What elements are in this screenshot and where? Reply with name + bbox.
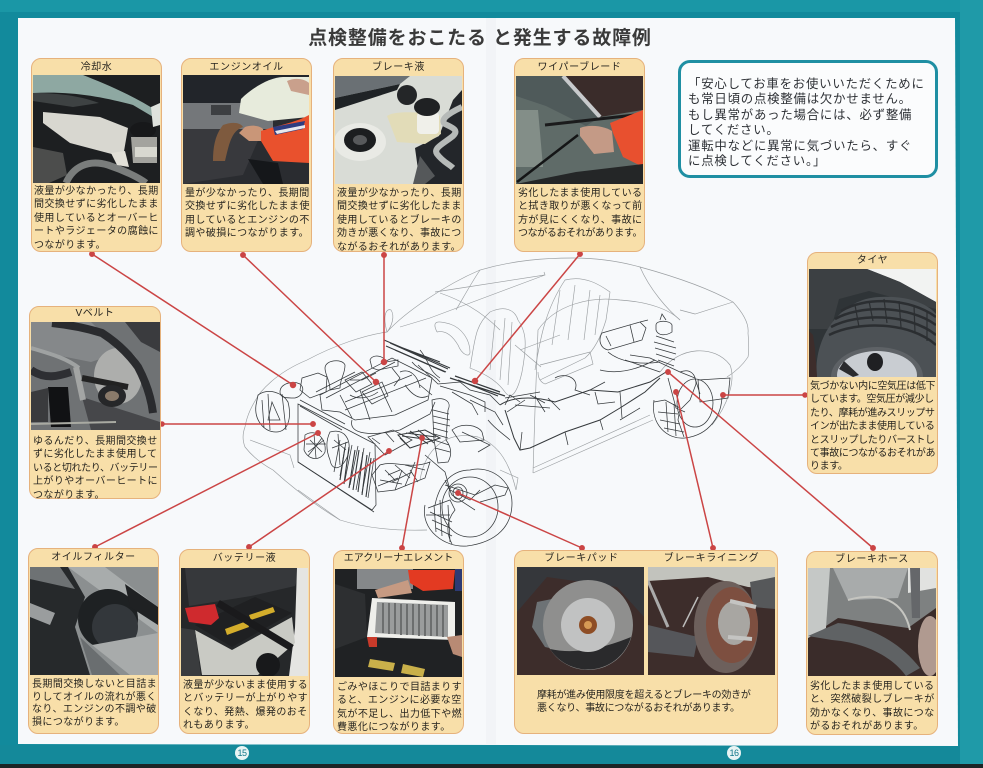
description: oil filter: 長期間交換しないと目詰ま: [32, 679, 157, 690]
heading: air cleaner element: エアクリーナエレメント: [344, 553, 453, 564]
description: engine oil: 交換せずに劣化したまま使: [185, 201, 310, 212]
car cutaway illustration: [242, 258, 749, 546]
description: tire: インが出たまま使用している: [810, 421, 934, 432]
description: battery fluid: [183, 679, 308, 731]
heading: brake pad: ブレーキパッド: [544, 553, 619, 564]
description: oil filter: なり、エンジンの不調や破: [32, 704, 157, 715]
front lamp: [256, 391, 290, 432]
callout text: も常日頃の点検整備は欠かせません。: [688, 92, 912, 106]
description: tire: しています。空気圧が減少し: [810, 394, 934, 405]
panel: V-belt: [29, 306, 161, 499]
description: air cleaner element: 気が不足し、出力低下や燃: [337, 709, 462, 720]
heading: battery fluid: バッテリー液: [213, 553, 276, 564]
description: V-belt: ずに劣化したまま使用して: [33, 449, 157, 460]
photo: oil filter: [30, 567, 158, 675]
page number 16: [727, 746, 741, 760]
leader: tire: [721, 393, 807, 397]
page number 16: 16: [729, 748, 738, 758]
description: tire: て事故につながるおそれがあ: [810, 448, 935, 459]
description: wiper blade: 劣化したまま使用している: [518, 188, 642, 199]
description: coolant: 間交換せずに劣化したまま: [34, 199, 159, 210]
heading: V-belt: Vベルト: [75, 308, 115, 319]
description: engine oil: [185, 187, 310, 239]
description: air cleaner element: 費悪化につながります。: [337, 722, 451, 733]
description: air cleaner element: ごみやほこりで目詰まりす: [337, 682, 462, 693]
steering wheel and seats: [435, 322, 470, 355]
description: tire: とスリップしたりバーストし: [810, 435, 935, 446]
heading: coolant: 冷却水: [81, 62, 112, 73]
callout text: 運転中などに異常に気づいたら、すぐ: [688, 139, 912, 153]
description: coolant: つながります。: [34, 240, 106, 251]
leader: air cleaner: [400, 436, 424, 550]
description: battery fluid: 液量が少ないまま使用する: [183, 680, 308, 691]
reservoirs: [280, 382, 303, 398]
description: V-belt: いると切れたり、バッテリー: [33, 463, 158, 474]
description: brake hose: [810, 680, 935, 732]
description: air cleaner element: [337, 681, 462, 733]
rear spring: [656, 321, 672, 335]
photo: battery: [181, 568, 308, 676]
callout text: [688, 77, 925, 168]
description: engine oil: 量が少なかったり、長期間: [185, 188, 310, 199]
description: brake fluid: 間交換せずに劣化したまま: [337, 201, 462, 212]
photo: pouring engine oil: [183, 75, 309, 184]
description: V-belt: 上がりやオーバーヒートに: [33, 476, 158, 487]
photo: coolant reservoir: [33, 75, 160, 183]
panel: air cleaner element: [333, 550, 464, 734]
description: coolant: 使用しているとオーバーヒ: [34, 213, 159, 224]
description: wiper blade: つながるおそれがあります。: [518, 228, 642, 239]
description: air cleaner element: ると、エンジンに必要な空: [337, 695, 462, 706]
title: 点検整備をおこたる と発生する故障例: [308, 28, 652, 49]
heading: tire: タイヤ: [857, 255, 888, 266]
battery and air box: [368, 430, 412, 455]
callout text: してください。: [688, 123, 780, 137]
leader: wiper blade: [472, 252, 582, 384]
strut: [432, 399, 451, 463]
panel: coolant: [31, 58, 162, 252]
heading: brake lining: ブレーキライニング: [664, 553, 759, 564]
photo: air cleaner: [335, 569, 462, 677]
callout: safety message: [678, 60, 938, 178]
description: brake hose: と、突然破裂しブレーキが: [810, 694, 935, 705]
panel: brake pad and brake lining: [514, 550, 778, 734]
callout text: もし異常があった場合には、必ず整備: [688, 108, 912, 122]
description: oil filter: りしてオイルの流れが悪く: [32, 692, 157, 703]
panel: tire: [807, 252, 938, 474]
front wheel: [424, 469, 512, 546]
description: oil filter: [32, 678, 157, 728]
photo: wiper blade: [516, 76, 643, 184]
description: brake hose: がるおそれがあります。: [810, 721, 924, 732]
description: tire: [810, 380, 935, 472]
muffler: [600, 322, 646, 350]
panel: wiper blade: [514, 58, 645, 252]
callout text: に点検してください。」: [688, 154, 826, 168]
fan and alternator: [304, 433, 326, 459]
callout text: 「安心してお車をお使いいただくために: [688, 77, 925, 91]
description: battery fluid: とバッテリーが上がりやす: [183, 693, 308, 704]
description: oil filter: 損につながります。: [32, 717, 125, 728]
description: brake fluid: [337, 187, 462, 253]
leader: brake fluid: [382, 253, 386, 364]
leader: engine oil: [241, 253, 378, 384]
description: brake fluid: 使用しているとブレーキの: [337, 215, 462, 226]
description: V-belt: ゆるんだり、長期間交換せ: [33, 436, 158, 447]
heading: brake hose: ブレーキホース: [835, 554, 909, 565]
description: brake pad and lining: 摩耗が進み使用限度を超えるとブレーキの効きが: [537, 690, 751, 701]
brake lines: [500, 372, 666, 405]
panel: battery fluid: [179, 549, 310, 734]
description: brake fluid: 効きが悪くなり、事故につ: [337, 228, 462, 239]
leader: brake hose: [666, 370, 875, 550]
panel: brake hose: [806, 551, 938, 735]
leader: coolant: [90, 252, 296, 388]
description: battery fluid: くなり、発熱、爆発のおそ: [183, 707, 308, 718]
photo: tire: [809, 269, 936, 377]
description: brake hose: 効かなくなり、事故につな: [810, 708, 935, 719]
description: brake pad and lining: [537, 689, 751, 714]
rear suspension: [625, 355, 700, 394]
photo: brake lining: [648, 567, 775, 675]
heading: oil filter: オイルフィルター: [51, 552, 136, 563]
description: wiper blade: と拭き取りが悪くなって前: [518, 201, 643, 212]
radiator: [298, 404, 376, 510]
description: V-belt: つながります。: [33, 490, 105, 501]
description: brake hose: 劣化したまま使用している: [810, 681, 934, 692]
heading: wiper blade: ワイパーブレード: [538, 62, 622, 73]
photo: brake hose: [808, 568, 936, 676]
description: coolant: ートやラジェータの腐蝕に: [34, 226, 159, 237]
description: brake fluid: ながるおそれがあります。: [337, 242, 461, 253]
page number 15: 15: [237, 748, 246, 758]
leader: brake pad: [456, 491, 584, 550]
leader: battery fluid: [247, 449, 391, 549]
photo: V-belt: [31, 322, 160, 430]
description: V-belt: [33, 435, 158, 501]
description: engine oil: 調や破損につながります。: [185, 228, 309, 239]
heading: engine oil: エンジンオイル: [209, 62, 284, 73]
panel: engine oil: [181, 58, 312, 252]
leader: brake lining: [674, 390, 715, 550]
leader: V belt: [160, 422, 315, 426]
heading: brake fluid: ブレーキ液: [372, 62, 425, 73]
description: brake pad and lining: 悪くなり、事故につながるおそれがあります。: [537, 703, 740, 714]
rear wheel: [653, 395, 722, 438]
description: brake fluid: 液量が少なかったり、長期: [337, 188, 462, 199]
wiper: [384, 340, 450, 372]
photo: brake fluid reservoir: [335, 76, 462, 184]
description: battery fluid: れもあります。: [183, 720, 255, 731]
photo: brake pad: [517, 567, 644, 675]
description: coolant: 液量が少なかったり、長期: [34, 186, 159, 197]
description: coolant: [34, 185, 159, 251]
leader: oil filter: [93, 431, 320, 549]
description: tire: ります。: [810, 461, 847, 472]
page number 15: [235, 746, 249, 760]
panel: oil filter: [28, 548, 159, 734]
description: tire: 気づかない内に空気圧は低下: [810, 381, 935, 392]
description: engine oil: 用しているとエンジンの不: [185, 215, 310, 226]
description: wiper blade: [518, 187, 643, 239]
description: wiper blade: 方が見にくくなり、事故に: [518, 215, 642, 226]
panel: brake fluid: [333, 58, 464, 252]
engine block: [320, 358, 432, 420]
description: tire: たり、摩耗が進みスリップサ: [810, 408, 935, 419]
